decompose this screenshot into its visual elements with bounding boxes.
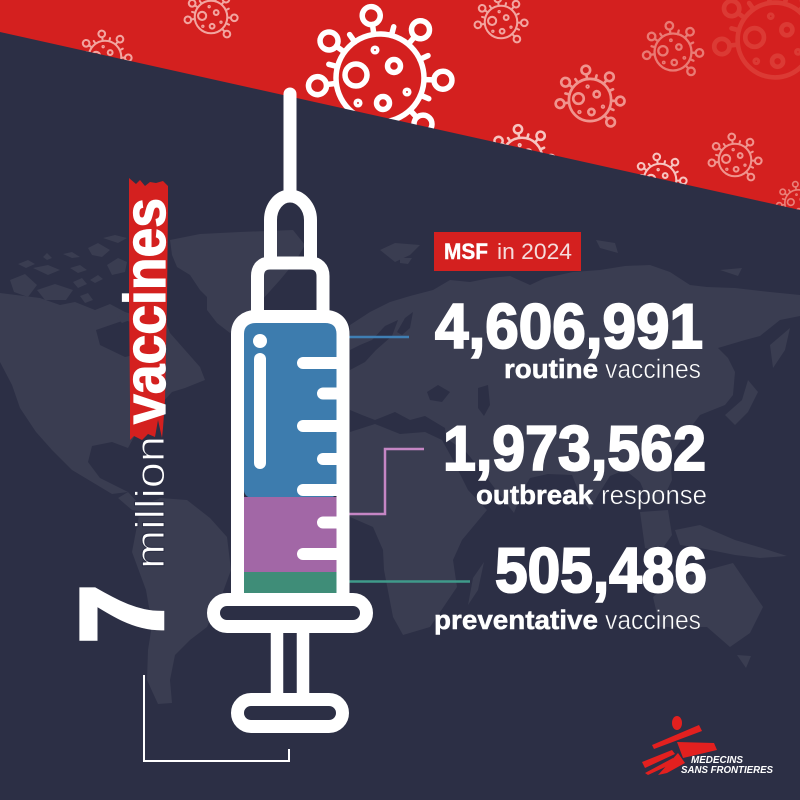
badge: MSF in 2024: MSF — [444, 239, 488, 264]
syringe — [214, 94, 366, 726]
connector: outbreak line — [349, 449, 424, 514]
heading: 7 million vaccines — [57, 178, 187, 643]
stat: outbreak response: 1,973,562 — [443, 414, 706, 484]
graduation marks — [297, 357, 338, 560]
needle — [284, 94, 296, 192]
world map — [0, 230, 800, 704]
stat: routine vaccines: 4,606,991 — [435, 292, 703, 362]
map: South America — [132, 498, 231, 704]
connector: preventative line — [349, 580, 470, 583]
bracket line — [144, 675, 289, 761]
word vaccines: vaccines — [113, 198, 178, 424]
map: Japan and Kamchatka — [725, 328, 790, 425]
liquid: routine blue — [244, 323, 337, 498]
thumb rest — [238, 700, 342, 726]
stat: outbreak response: response — [601, 480, 707, 510]
plunger rod — [277, 633, 303, 693]
liquid: preventative green — [244, 572, 337, 593]
map: Tasmania — [737, 655, 751, 668]
hub — [270, 196, 310, 263]
liquid: outbreak purple — [244, 497, 337, 573]
map: Africa — [350, 424, 487, 635]
badge: MSF in 2024 — [434, 232, 581, 271]
stat: preventative vaccines: 505,486 — [495, 536, 707, 606]
number 7: 7 — [57, 585, 187, 643]
map: Eurasia — [350, 265, 800, 513]
icon: large white virus — [307, 5, 452, 137]
map: Greenland — [170, 230, 305, 333]
map: Madagascar — [468, 562, 484, 605]
logo: Medecins Sans Frontieres — [642, 716, 773, 776]
stat: preventative vaccines: preventative — [434, 605, 598, 635]
icon: faint viruses — [78, 0, 800, 221]
map: Arctic islands — [10, 235, 130, 323]
word million: million — [127, 436, 173, 569]
map: North America — [0, 293, 205, 494]
logo: Medecins Sans Frontieres: SANS FRONTIERES — [681, 764, 773, 776]
stat: outbreak response: outbreak — [476, 480, 594, 510]
badge: MSF in 2024: in 2024 — [497, 239, 572, 264]
stat: routine vaccines: vaccines — [605, 354, 701, 384]
connector: routine line — [349, 336, 409, 338]
stat: preventative vaccines: vaccines — [605, 605, 701, 635]
brush stroke behind vaccines — [129, 178, 168, 440]
map: Central America — [118, 492, 162, 512]
logo: Medecins Sans Frontieres: MEDECINS — [691, 754, 743, 766]
map: Iceland and northern islands — [380, 240, 742, 276]
stat: outbreak response — [443, 414, 707, 510]
barrel — [238, 316, 343, 600]
neck — [258, 263, 323, 316]
stat: routine vaccines: routine — [504, 354, 598, 384]
map: inland seas — [397, 312, 490, 416]
flange — [214, 600, 366, 626]
stat: preventative vaccines — [434, 536, 707, 635]
panel: red banner with viruses — [0, 0, 800, 221]
map: Southeast Asia and Indonesia — [640, 510, 787, 558]
map: Australia — [653, 563, 763, 647]
icon: MSF running figure — [642, 716, 717, 775]
highlight dot and bar — [253, 334, 267, 469]
